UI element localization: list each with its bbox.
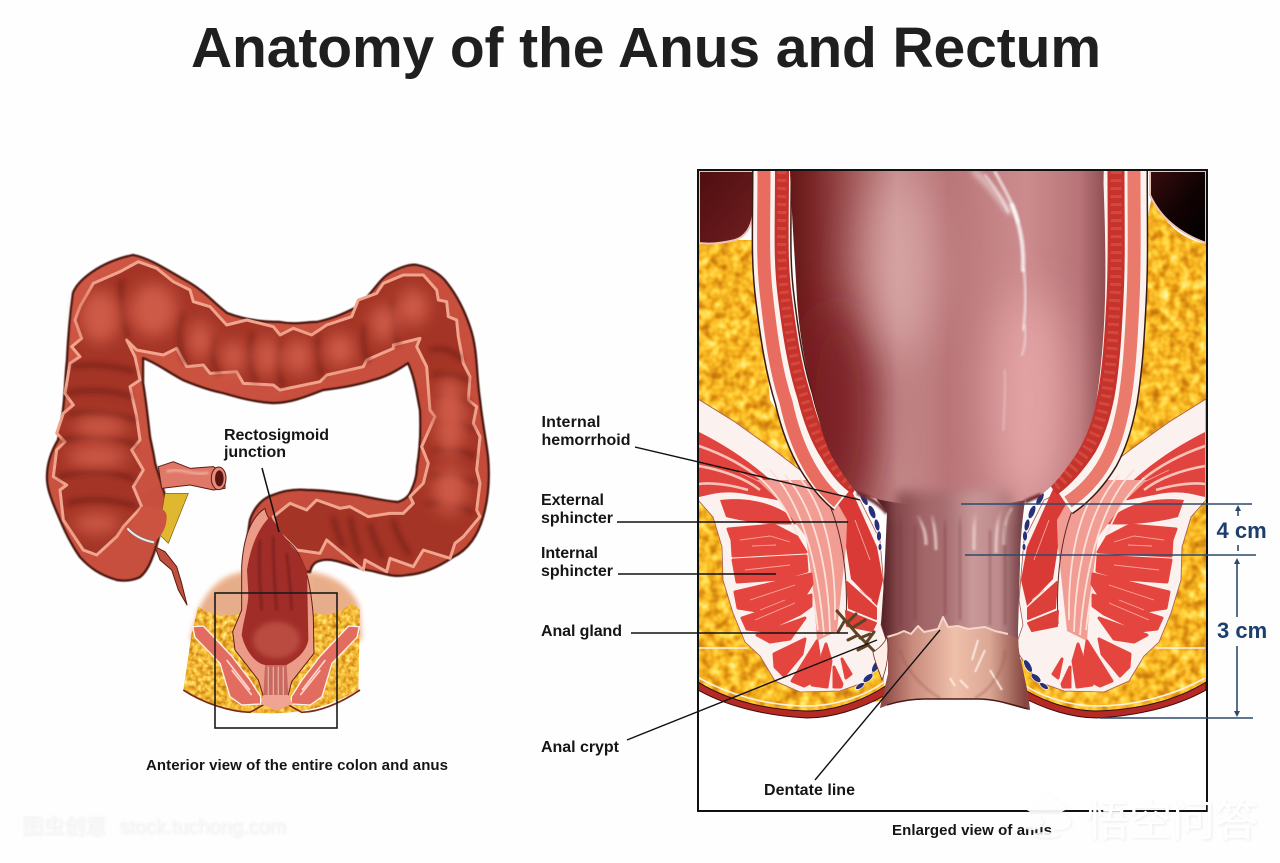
ischiorectal fat bbox=[699, 195, 1206, 714]
label: external sphincter bbox=[541, 492, 848, 527]
watermark: wukong wenda: 悟空问答 bbox=[1086, 798, 1258, 846]
label: rectosigmoid junction bbox=[223, 427, 329, 532]
label: anal crypt bbox=[541, 640, 877, 756]
label: internal sphincter: sphincter bbox=[541, 563, 613, 580]
label: internal hemorrhoid: Internal bbox=[542, 414, 600, 431]
ileum bbox=[158, 462, 226, 490]
cecum lower rim bbox=[128, 507, 167, 543]
arrow: rectosigmoid junction bbox=[262, 468, 279, 532]
label: internal hemorrhoid bbox=[542, 414, 860, 500]
haustral highlights bbox=[67, 283, 467, 533]
anal gland bbox=[837, 611, 874, 651]
caption: anterior view: Anterior view of the entire colon and anus bbox=[146, 757, 448, 774]
label: rectosigmoid junction: Rectosigmoid bbox=[224, 427, 329, 444]
label: dentate line bbox=[764, 630, 940, 799]
label: anal gland: Anal gland bbox=[541, 623, 622, 640]
external sphincter and levator, right bbox=[1015, 399, 1206, 692]
rectal wall, left bbox=[764, 171, 856, 502]
mesentery bbox=[158, 493, 188, 543]
anal crypt fold bbox=[873, 637, 888, 680]
levator muscle right bbox=[291, 626, 359, 705]
ileocecal band bbox=[127, 528, 154, 542]
label: internal sphincter: Internal bbox=[541, 545, 598, 562]
anoderm below dentate line bbox=[880, 620, 1030, 710]
inset frame bbox=[215, 593, 337, 728]
dentate line bbox=[887, 617, 1008, 637]
panel: enlarged view of anus bbox=[698, 165, 1207, 839]
appendix bbox=[155, 547, 187, 605]
skin edge, left bbox=[698, 682, 887, 718]
measurement: 4 cm bbox=[961, 504, 1267, 555]
rectum and anal canal, small bbox=[233, 508, 314, 711]
colon lumen bbox=[53, 262, 480, 572]
watermark: tuchong: 图虫创意 bbox=[22, 815, 106, 838]
measurement: 3 cm: 3 cm bbox=[1217, 618, 1267, 643]
pelvic cavity, right bbox=[1150, 171, 1206, 243]
colon bbox=[47, 255, 489, 605]
neck blending into canal bbox=[896, 492, 1010, 520]
watermark: wukong logo bbox=[1021, 792, 1071, 838]
label: internal hemorrhoid: hemorrhoid bbox=[542, 432, 630, 449]
watermark: tuchong bbox=[22, 815, 286, 838]
panel: entire colon and anus bbox=[47, 255, 489, 774]
external sphincter and levator, left bbox=[698, 399, 889, 692]
skin edge, right bbox=[1017, 682, 1206, 718]
title: Anatomy of the Anus and Rectum bbox=[191, 16, 1101, 80]
pelvic floor fat and soft tissue bbox=[183, 572, 362, 713]
label: external sphincter: External bbox=[541, 492, 604, 509]
haustral folds bbox=[58, 280, 475, 558]
mucosal highlights bbox=[975, 172, 1025, 430]
caption: enlarged view: Enlarged view of anus bbox=[892, 822, 1052, 839]
anal canal bbox=[876, 498, 1030, 710]
levator muscle left bbox=[193, 626, 261, 705]
label: anal crypt: Anal crypt bbox=[541, 739, 620, 756]
label: dentate line: Dentate line bbox=[764, 782, 855, 799]
panel border bbox=[698, 170, 1207, 811]
label: rectosigmoid junction: junction bbox=[223, 444, 286, 461]
measurement: 4 cm: 4 cm bbox=[1216, 518, 1267, 543]
veins, right bbox=[1022, 492, 1049, 691]
watermark: tuchong: stock.tuchong.com bbox=[119, 816, 286, 838]
panel background bbox=[698, 170, 1207, 811]
label: external sphincter: sphincter bbox=[541, 510, 613, 527]
veins, left bbox=[855, 492, 882, 691]
measurement: 3 cm bbox=[1100, 558, 1267, 718]
label: internal sphincter bbox=[541, 545, 776, 580]
rectal lumen bbox=[790, 171, 1106, 504]
pelvic cavity, left bbox=[699, 171, 753, 244]
rectal wall, right bbox=[1052, 171, 1134, 502]
